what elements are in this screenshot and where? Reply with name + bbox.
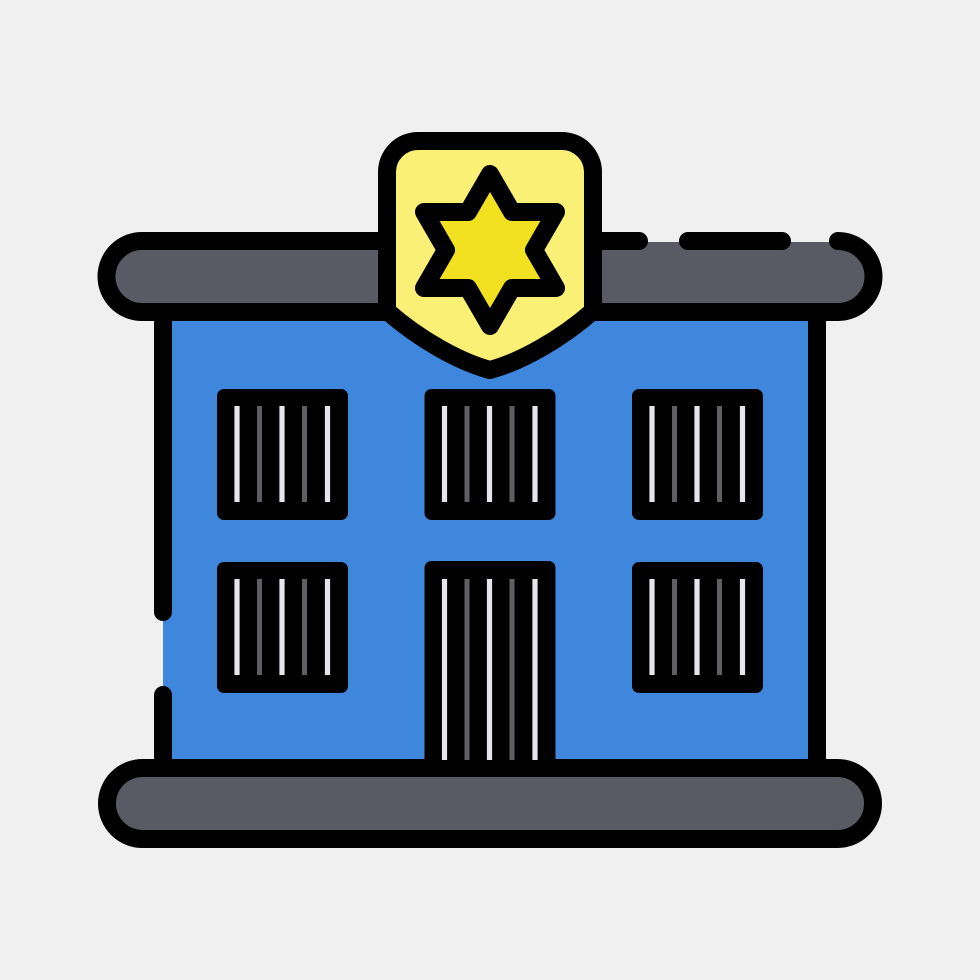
roof bbox=[106, 241, 873, 312]
window: bottom left bbox=[217, 562, 348, 693]
base bbox=[107, 768, 873, 839]
window: top middle bbox=[424, 389, 556, 520]
window: top right bbox=[632, 389, 763, 520]
window: top left bbox=[217, 389, 348, 520]
building wall bbox=[163, 312, 817, 770]
star bbox=[424, 174, 556, 326]
shield bbox=[387, 141, 593, 370]
window: bottom right bbox=[632, 562, 763, 693]
badge: shield with star bbox=[387, 141, 593, 370]
door bbox=[424, 561, 556, 768]
